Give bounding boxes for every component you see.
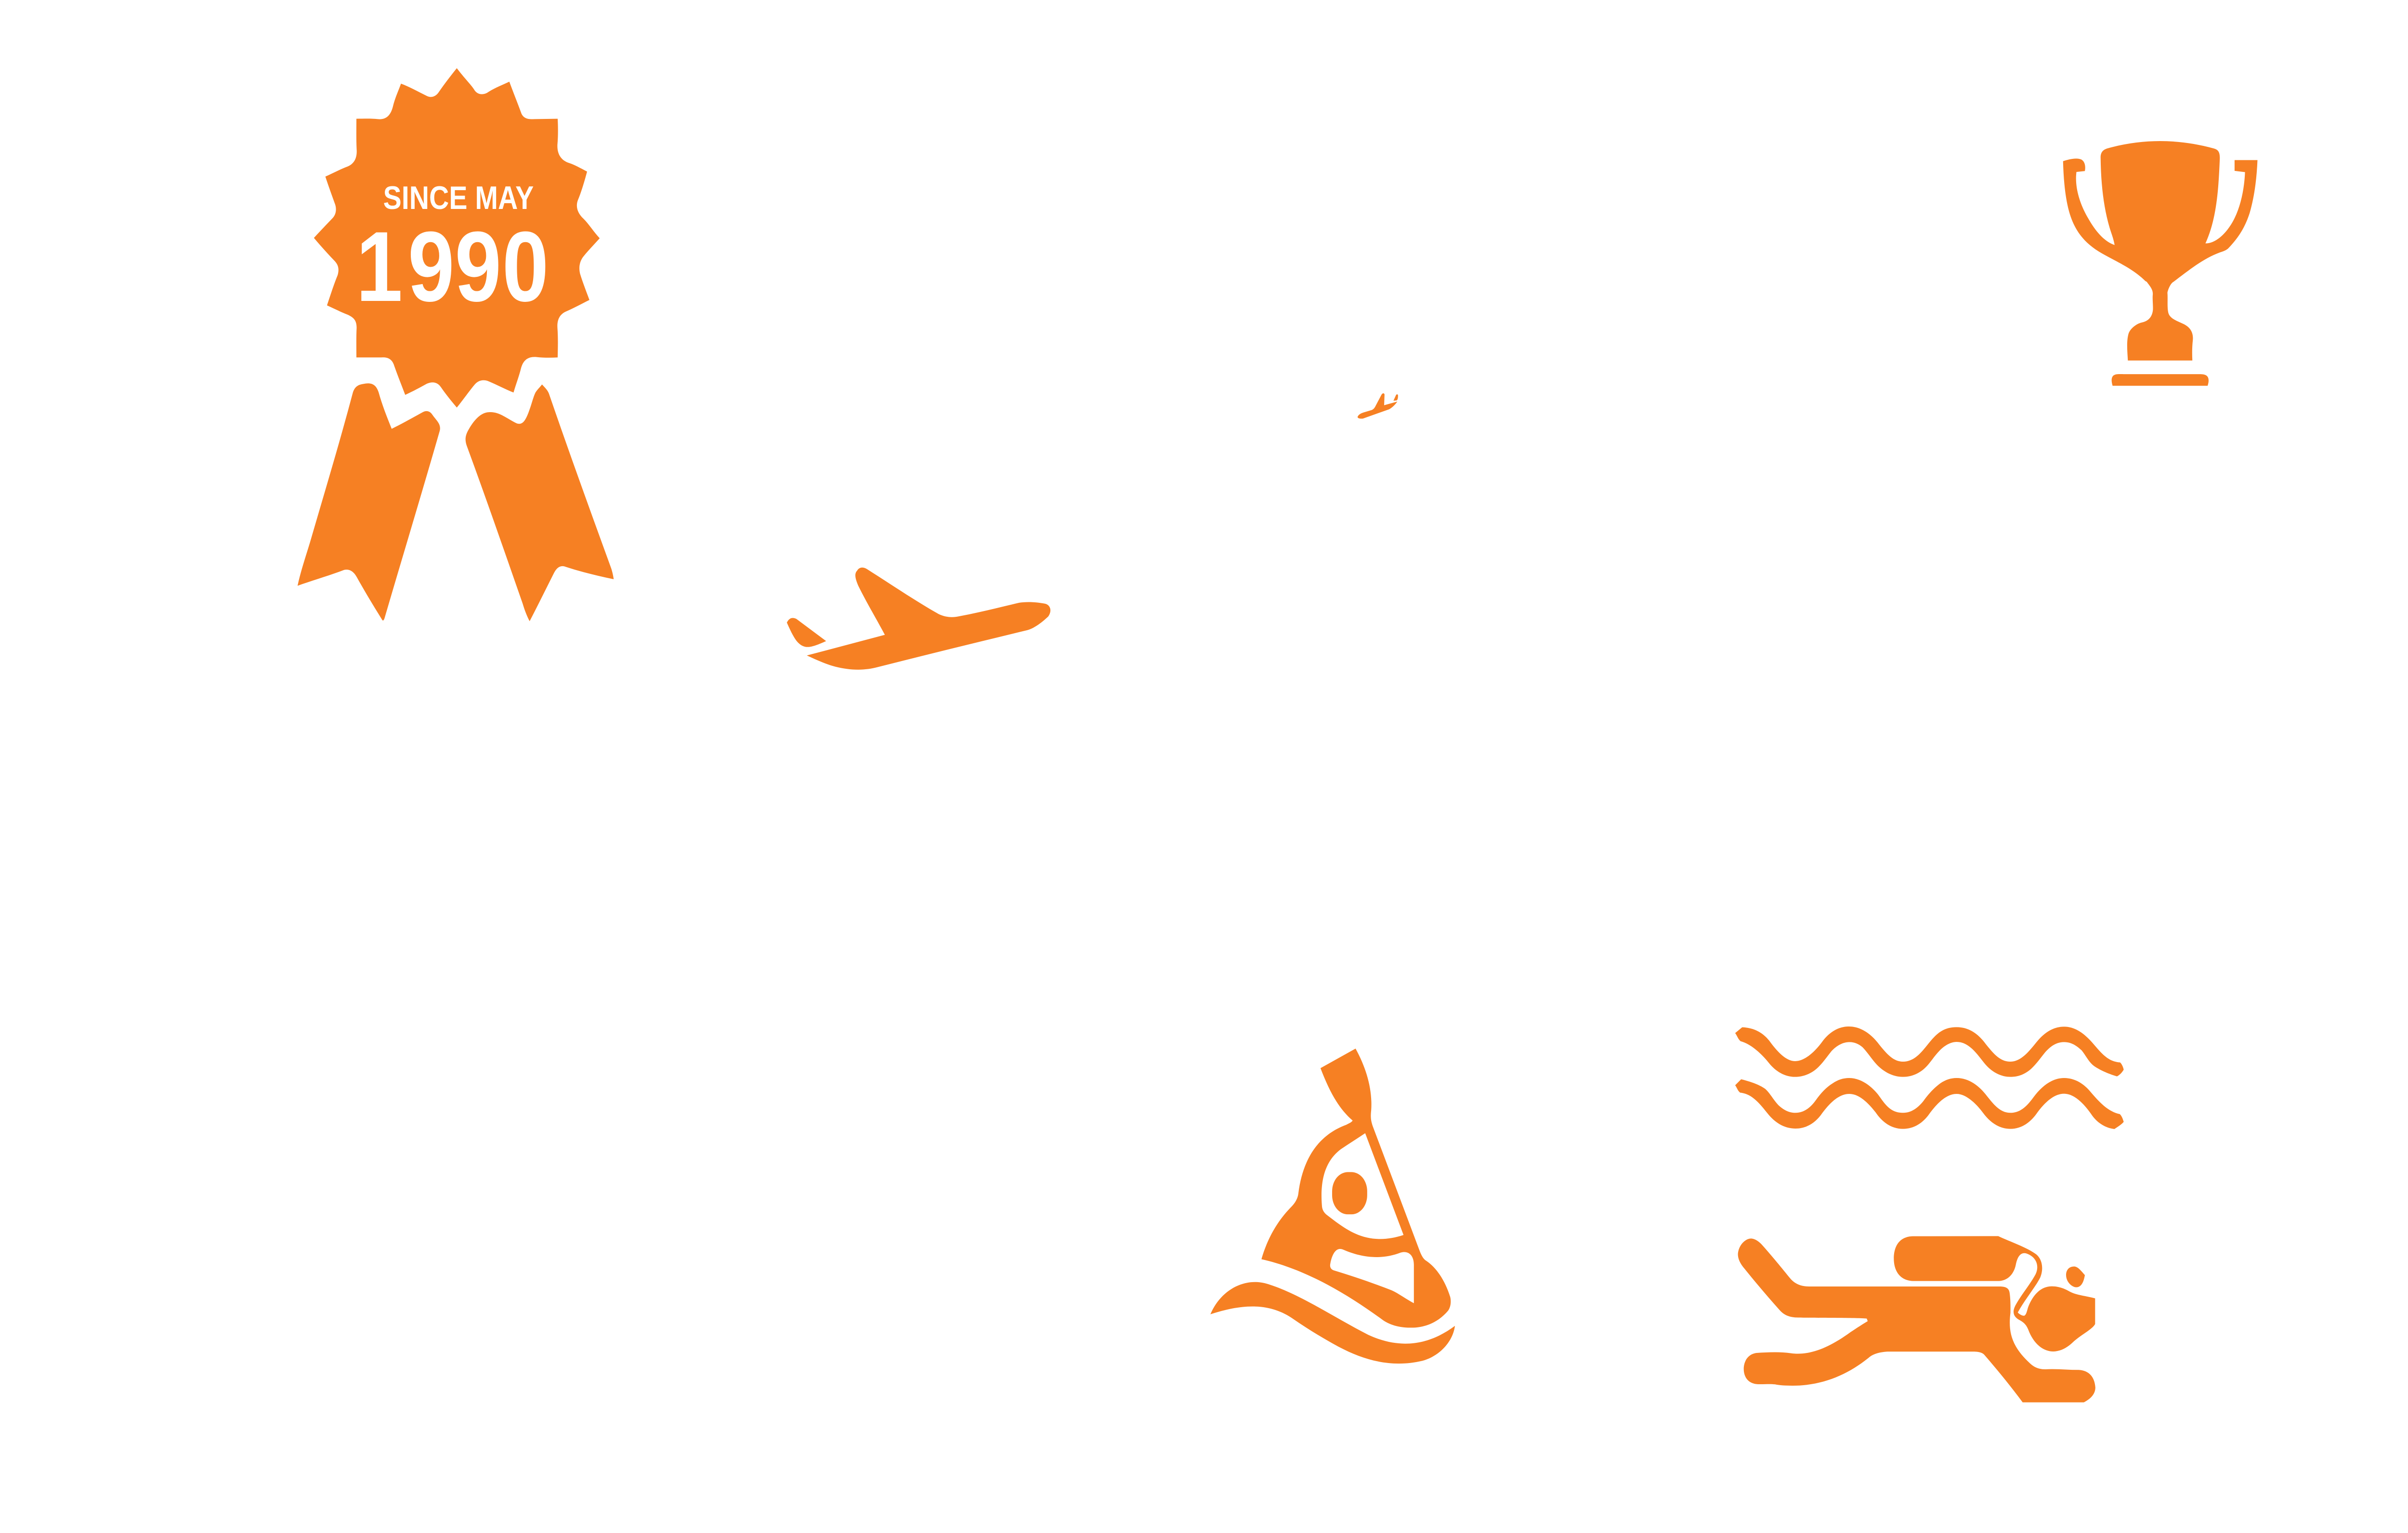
icon: water waves — [1735, 1026, 2124, 1129]
icon: trophy — [2063, 141, 2257, 386]
icon: small airplane landing — [1358, 393, 1398, 419]
icon: kayaker on wave — [1210, 1049, 1455, 1364]
icon: scuba diver — [1738, 1236, 2095, 1403]
rosette seal and ribbons — [298, 68, 614, 621]
icon: airplane taking off — [787, 568, 1050, 670]
text: 1990: 1990 — [356, 211, 549, 322]
icon: award rosette since May 1990 — [298, 68, 614, 621]
text: since may: SINCE MAY — [383, 180, 534, 216]
